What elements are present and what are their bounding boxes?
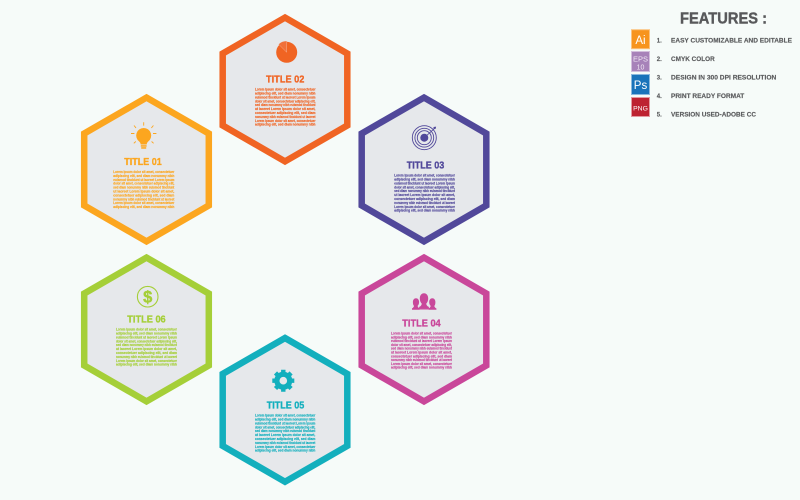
text block: title 02 body: Lorem ipsum dolor sit amet, consectetuer bbox=[255, 88, 316, 92]
icon: gear bbox=[272, 370, 294, 392]
text block: title 04 body: ut laoreet Lorem ipsum dolor sit amet, bbox=[391, 350, 452, 354]
feature list: EASY CUSTOMIZABLE AND EDITABLE bbox=[671, 39, 792, 45]
text block: title 01 body: Lorem ipsum dolor sit amet, consectetuer bbox=[113, 170, 175, 174]
text block: title 05 body: adipiscing elit, sed diam nonummy nibh bbox=[255, 449, 316, 453]
text block: title 06 body: adipiscing elit, sed diam nonummy nibh bbox=[116, 363, 178, 367]
text block: title 06 body bbox=[116, 328, 178, 367]
icon: PNG file badge: PNG bbox=[633, 106, 648, 112]
text block: title 04 body: euismod tincidunt ut laoreet Lorem ipsum bbox=[391, 339, 453, 343]
text block: title 05 body: euismod tincidunt ut laoreet Lorem ipsum bbox=[255, 421, 316, 425]
heading: features: FEATURES : bbox=[680, 10, 767, 28]
heading: title 05: TITLE 05 bbox=[267, 400, 305, 411]
text block: title 06 body: dolor sit amet, consectetuer adipiscing elit, bbox=[116, 339, 177, 343]
icon: Ps file badge: Ps bbox=[634, 80, 647, 92]
heading: title 03: TITLE 03 bbox=[407, 160, 445, 171]
feature list: 5. bbox=[657, 112, 662, 118]
feature list: 2. bbox=[657, 57, 662, 63]
heading: title 04: TITLE 04 bbox=[402, 319, 441, 330]
text block: title 01 body: adipiscing elit, sed diam nonummy nibh bbox=[113, 205, 175, 209]
text block: title 01 body: ut laoreet Lorem ipsum dolor sit amet, bbox=[113, 190, 174, 194]
text block: title 06 body: sed diam nonummy nibh euismod tincidunt bbox=[116, 343, 178, 347]
text block: title 02 body bbox=[255, 88, 316, 127]
text block: title 02 body: Lorem ipsum dolor sit amet, consectetuer bbox=[255, 119, 316, 123]
text block: title 06 body: adipiscing elit, sed diam nonummy nibh bbox=[116, 332, 178, 336]
panel: title 05 hexagon bbox=[223, 338, 347, 482]
text block: title 05 body bbox=[255, 414, 316, 453]
feature list: 1. bbox=[657, 39, 662, 45]
feature list bbox=[657, 39, 792, 118]
icon: people group bbox=[412, 293, 436, 310]
text block: title 03 body bbox=[394, 174, 456, 213]
text block: title 04 body bbox=[391, 332, 453, 370]
text block: title 04 body: adipiscing elit, sed diam nonummy nibh bbox=[391, 335, 453, 339]
feature list: CMYK COLOR bbox=[671, 57, 715, 63]
text block: title 04 body: consectetuer adipiscing elit, sed diam bbox=[391, 354, 453, 358]
text block: title 04 body: dolor sit amet, consectetuer adipiscing elit, bbox=[391, 343, 452, 347]
panel: title 02 hexagon bbox=[223, 18, 347, 161]
icon: dollar coin bbox=[137, 286, 158, 307]
text block: title 02 body: adipiscing elit, sed diam nonummy nibh bbox=[255, 92, 316, 96]
icon: Ai file badge: Ai bbox=[635, 35, 646, 47]
heading: title 02: TITLE 02 bbox=[266, 75, 305, 86]
text block: title 03 body: adipiscing elit, sed diam nonummy nibh bbox=[394, 178, 456, 182]
text block: title 03 body: Lorem ipsum dolor sit amet, consectetuer bbox=[394, 174, 455, 178]
icon: EPS 10 file badge: 10 bbox=[637, 64, 644, 72]
feature list: 4. bbox=[657, 94, 662, 100]
feature list: PRINT READY FORMAT bbox=[671, 94, 745, 100]
panel: features bbox=[632, 10, 792, 118]
text block: title 01 body: dolor sit amet, consectetuer adipiscing elit, bbox=[113, 182, 174, 186]
text block: title 06 body: nonummy nibh euismod tincidunt ut laoreet bbox=[116, 355, 178, 359]
text block: title 03 body: nonummy nibh euismod tincidunt ut laoreet bbox=[394, 201, 456, 205]
text block: title 05 body: adipiscing elit, sed diam nonummy nibh bbox=[255, 418, 316, 422]
text block: title 03 body: ut laoreet Lorem ipsum dolor sit amet, bbox=[394, 193, 455, 197]
text block: title 06 body: euismod tincidunt ut laoreet Lorem ipsum bbox=[116, 335, 178, 339]
text block: title 01 body: sed diam nonummy nibh euismod tincidunt bbox=[113, 186, 175, 190]
text block: title 02 body: adipiscing elit, sed diam nonummy nibh bbox=[255, 123, 316, 127]
panel: title 04 hexagon bbox=[362, 258, 486, 401]
text block: title 02 body: euismod tincidunt ut laoreet Lorem ipsum bbox=[255, 95, 316, 99]
icon: EPS 10 file badge: EPS bbox=[633, 54, 648, 64]
icon: pie chart bbox=[276, 41, 297, 63]
text block: title 05 body: consectetuer adipiscing elit, sed diam bbox=[255, 437, 316, 441]
heading: title 06: TITLE 06 bbox=[127, 315, 166, 326]
text block: title 01 body: nonummy nibh euismod tincidunt ut laoreet bbox=[113, 197, 175, 201]
text block: title 05 body: Lorem ipsum dolor sit amet, consectetuer bbox=[255, 414, 316, 418]
text block: title 02 body: sed diam nonummy nibh euismod tincidunt bbox=[255, 103, 316, 107]
text block: title 06 body: Lorem ipsum dolor sit amet, consectetuer bbox=[116, 359, 177, 363]
feature list: 3. bbox=[657, 75, 662, 81]
text block: title 01 body: Lorem ipsum dolor sit amet, consectetuer bbox=[113, 201, 175, 205]
text block: title 04 body: sed diam nonummy nibh euismod tincidunt bbox=[391, 347, 453, 351]
text block: title 02 body: dolor sit amet, consectetuer adipiscing elit, bbox=[255, 99, 316, 103]
text block: title 06 body: ut laoreet Lorem ipsum dolor sit amet, bbox=[116, 347, 177, 351]
icon: EPS 10 file badge bbox=[632, 52, 650, 72]
text block: title 02 body: nonummy nibh euismod tincidunt ut laoreet bbox=[255, 115, 316, 119]
icon: target bbox=[412, 126, 436, 150]
icon: Ai file badge bbox=[632, 30, 650, 49]
text block: title 05 body: ut laoreet Lorem ipsum dolor sit amet, bbox=[255, 433, 315, 437]
panel: title 01 hexagon bbox=[84, 98, 209, 241]
feature list: VERSION USED-ADOBE CC bbox=[671, 112, 757, 118]
text block: title 04 body: Lorem ipsum dolor sit amet, consectetuer bbox=[391, 362, 452, 366]
text block: title 06 body: consectetuer adipiscing elit, sed diam bbox=[116, 351, 178, 355]
text block: title 05 body: nonummy nibh euismod tincidunt ut laoreet bbox=[255, 441, 316, 445]
text block: title 04 body: Lorem ipsum dolor sit amet, consectetuer bbox=[391, 332, 452, 336]
text block: title 03 body: dolor sit amet, consectetuer adipiscing elit, bbox=[394, 185, 455, 189]
text block: title 03 body: Lorem ipsum dolor sit amet, consectetuer bbox=[394, 205, 455, 209]
heading: title 01: TITLE 01 bbox=[124, 157, 162, 168]
text block: title 04 body: nonummy nibh euismod tincidunt ut laoreet bbox=[391, 358, 453, 362]
text block: title 03 body: euismod tincidunt ut laoreet Lorem ipsum bbox=[394, 181, 456, 185]
text block: title 03 body: consectetuer adipiscing elit, sed diam bbox=[394, 197, 456, 201]
text block: title 01 body: consectetuer adipiscing elit, sed diam bbox=[113, 193, 175, 197]
text block: title 03 body: adipiscing elit, sed diam nonummy nibh bbox=[394, 209, 456, 213]
text block: title 06 body: Lorem ipsum dolor sit amet, consectetuer bbox=[116, 328, 177, 332]
text block: title 05 body: Lorem ipsum dolor sit amet, consectetuer bbox=[255, 445, 316, 449]
text block: title 03 body: sed diam nonummy nibh euismod tincidunt bbox=[394, 189, 456, 193]
text block: title 01 body: adipiscing elit, sed diam nonummy nibh bbox=[113, 174, 175, 178]
text block: title 01 body: euismod tincidunt ut laoreet Lorem ipsum bbox=[113, 178, 175, 182]
text block: title 05 body: dolor sit amet, consectetuer adipiscing elit, bbox=[255, 425, 315, 429]
text block: title 02 body: ut laoreet Lorem ipsum dolor sit amet, bbox=[255, 107, 316, 111]
icon: Ps file badge bbox=[632, 74, 650, 94]
text block: title 05 body: sed diam nonummy nibh euismod tincidunt bbox=[255, 429, 316, 433]
text block: title 01 body bbox=[113, 170, 175, 209]
icon: dollar coin: $ bbox=[143, 289, 152, 307]
text block: title 02 body: consectetuer adipiscing elit, sed diam bbox=[255, 111, 316, 115]
feature list: DESIGN IN 300 DPI RESOLUTION bbox=[671, 75, 776, 81]
text block: title 04 body: adipiscing elit, sed diam nonummy nibh bbox=[391, 366, 453, 370]
panel: title 06 hexagon bbox=[84, 258, 209, 401]
panel: title 03 hexagon bbox=[362, 98, 486, 241]
icon: PNG file badge bbox=[632, 98, 650, 116]
icon: light bulb bbox=[131, 122, 156, 149]
